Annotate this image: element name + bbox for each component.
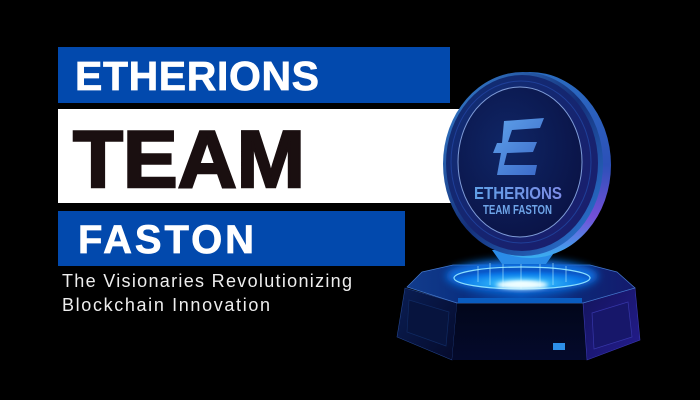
banner: Faston <box>58 211 405 266</box>
pedestal right side <box>583 288 640 360</box>
coin label: ETHERIONS <box>474 183 562 203</box>
coin stem glow <box>492 250 556 264</box>
tagline: The Visionaries Revolutionizing <box>62 271 352 291</box>
platform halo <box>446 259 598 293</box>
tagline: Blockchain Innovation <box>62 295 270 315</box>
tagline <box>62 271 352 315</box>
banner: Etherions <box>58 47 450 103</box>
coin rim <box>443 72 603 256</box>
coin face <box>458 87 582 237</box>
pedestal top deck <box>407 265 635 303</box>
heading: ETHERIONS: ETHERIONS <box>75 53 319 99</box>
light rays <box>478 261 566 289</box>
pedestal left side <box>397 288 457 360</box>
coin band <box>446 75 598 251</box>
small indicator light <box>553 343 565 350</box>
glowing platform <box>454 267 590 289</box>
pedestal front <box>452 303 587 360</box>
heading: FASTON: FASTON <box>78 218 254 262</box>
coin edge <box>449 72 611 258</box>
coin: TEAM FASTON <box>483 203 552 217</box>
coin <box>443 72 611 264</box>
logo E <box>493 118 544 175</box>
pedestal <box>397 259 640 360</box>
banner: Team <box>58 109 478 205</box>
heading: TEAM: TEAM <box>73 115 305 205</box>
coin outer ring <box>451 81 591 243</box>
